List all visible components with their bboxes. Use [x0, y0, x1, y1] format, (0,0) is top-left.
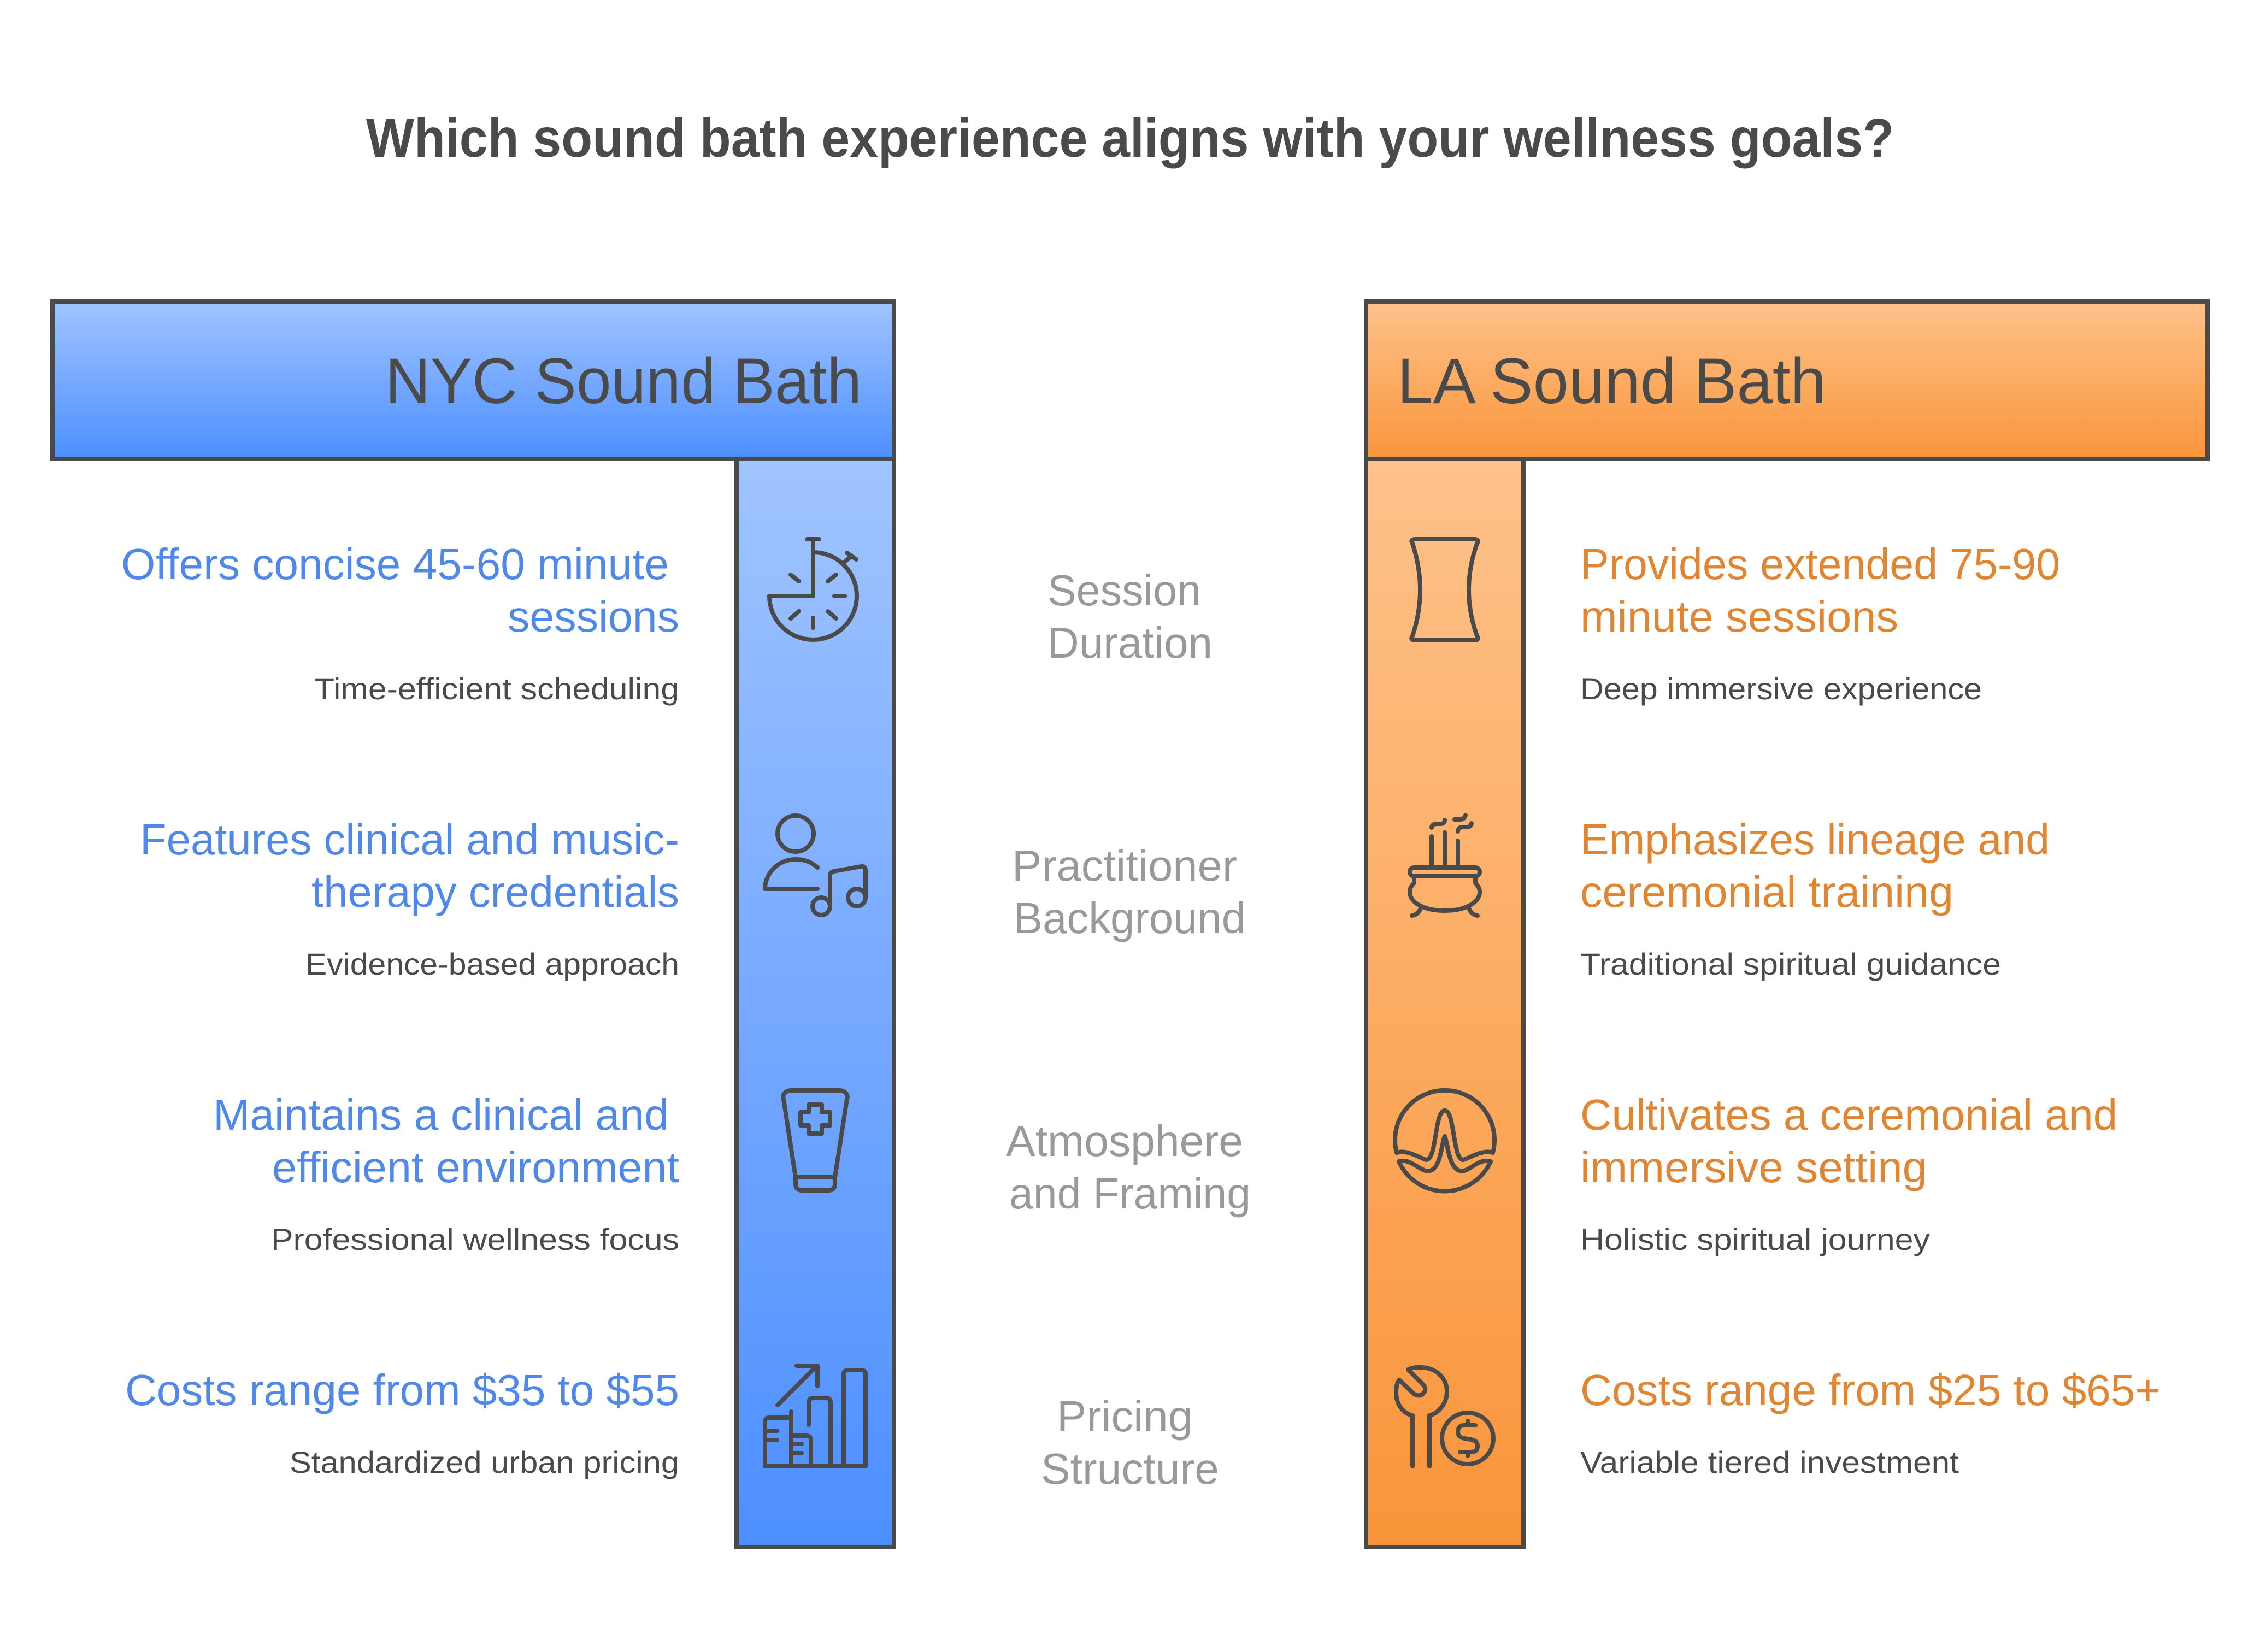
- label: session duration: [1047, 566, 1213, 667]
- LA row 1 text: Provides extended 75-90: [1580, 540, 2060, 588]
- LA heading: LA Sound Bath: [1397, 345, 1826, 417]
- NYC vertical bar: [737, 459, 894, 1547]
- NYC row 1 text: Offers concise 45-60 minute: [121, 540, 669, 588]
- NYC row 4 text: Costs range from $35 to $55: [125, 1366, 679, 1414]
- LA row 3 text: immersive setting: [1580, 1143, 1927, 1191]
- icon: medical tube: [783, 1090, 848, 1190]
- icon: rising bar chart: [765, 1366, 866, 1466]
- label: atmosphere and framing: [1006, 1117, 1251, 1218]
- panel: LA Sound Bath: [1366, 302, 2208, 1547]
- label: atmosphere and framing: and Framing: [1009, 1169, 1251, 1218]
- LA vertical bar: [1366, 459, 1523, 1547]
- icon: incense cauldron: [1410, 815, 1480, 916]
- NYC row 2 text: Features clinical and music-: [140, 815, 679, 864]
- LA row 3 text: [1580, 1090, 2117, 1256]
- NYC row 1 text: Time-efficient scheduling: [314, 671, 679, 706]
- label: pricing structure: Structure: [1041, 1444, 1219, 1493]
- label: atmosphere and framing: Atmosphere: [1006, 1117, 1243, 1165]
- title: Which sound bath experience aligns with your wellness goals?: [366, 108, 1894, 169]
- LA row 1 text: Deep immersive experience: [1580, 671, 1982, 706]
- LA row 2 text: Traditional spiritual guidance: [1580, 947, 2001, 981]
- NYC row 2 text: Evidence-based approach: [305, 947, 679, 981]
- NYC row 4 text: Standardized urban pricing: [290, 1445, 679, 1479]
- NYC row 1 text: [121, 540, 679, 706]
- panel: NYC Sound Bath: [52, 302, 894, 1547]
- NYC row 2 text: therapy credentials: [311, 868, 679, 916]
- NYC header banner: [52, 302, 894, 459]
- LA row 1 text: minute sessions: [1580, 592, 1898, 641]
- LA row 2 text: [1580, 815, 2050, 981]
- LA row 3 text: Holistic spiritual journey: [1580, 1222, 1930, 1256]
- label: pricing structure: Pricing: [1057, 1392, 1193, 1441]
- LA row 4 text: Variable tiered investment: [1580, 1445, 1959, 1479]
- NYC row 3 text: [213, 1090, 679, 1256]
- LA header banner: [1366, 302, 2208, 459]
- label: practitioner background: [1012, 841, 1246, 942]
- NYC heading: NYC Sound Bath: [385, 345, 862, 417]
- LA row 4 text: Costs range from $25 to $65+: [1580, 1366, 2161, 1414]
- label: pricing structure: [1041, 1392, 1219, 1493]
- label: session duration: Duration: [1047, 618, 1213, 667]
- LA row 3 text: Cultivates a ceremonial and: [1580, 1090, 2117, 1139]
- LA row 2 text: Emphasizes lineage and: [1580, 815, 2050, 864]
- NYC row 4 text: [125, 1366, 679, 1479]
- LA row 4 text: [1580, 1366, 2161, 1479]
- label: practitioner background: Practitioner: [1012, 841, 1237, 890]
- icon: sound wave in circle: [1395, 1090, 1494, 1191]
- NYC row 3 text: Maintains a clinical and: [213, 1090, 669, 1139]
- label: session duration: Session: [1047, 566, 1201, 615]
- NYC row 1 text: sessions: [508, 592, 679, 641]
- NYC row 3 text: efficient environment: [272, 1143, 679, 1191]
- icon: stopwatch: [769, 539, 857, 640]
- icon: person with music notes: [765, 816, 866, 915]
- LA row 2 text: ceremonial training: [1580, 868, 1953, 916]
- label: practitioner background: Background: [1014, 894, 1246, 942]
- icon: hourglass drum: [1411, 539, 1478, 640]
- icon: wrench and dollar coin: [1396, 1367, 1493, 1466]
- panel: comparison criteria: [1006, 566, 1251, 1493]
- LA row 1 text: [1580, 540, 2060, 706]
- NYC row 2 text: [140, 815, 679, 981]
- NYC row 3 text: Professional wellness focus: [271, 1222, 679, 1256]
